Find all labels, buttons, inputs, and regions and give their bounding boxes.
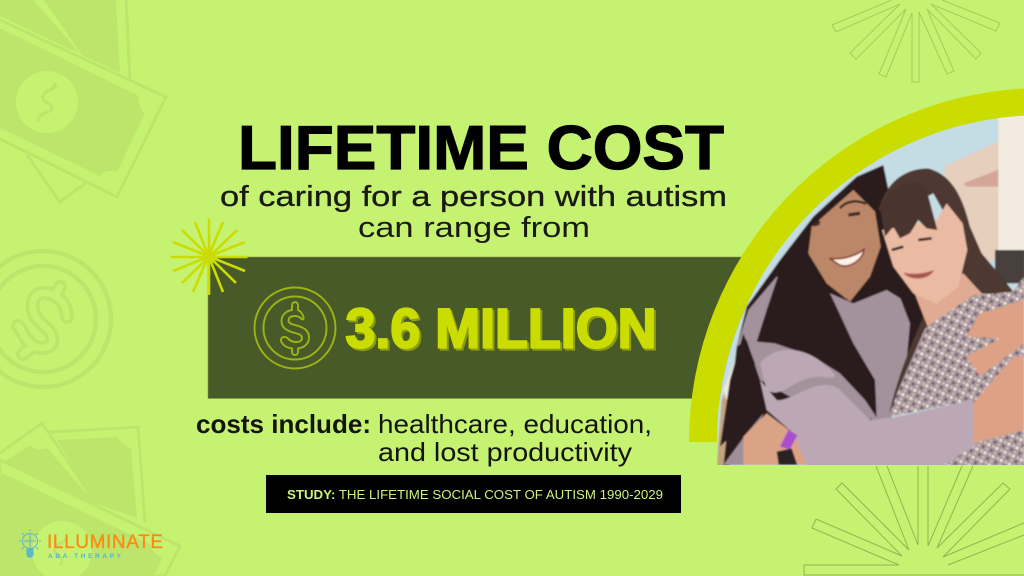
watch: [780, 430, 797, 449]
icon: coin left: [0, 251, 111, 387]
logo wordmark: ILLUMINATE: [47, 532, 163, 553]
big number: 3.6 MILLION: [348, 298, 658, 362]
icon: money bills top left: [0, 0, 166, 202]
icon: lime starburst: [170, 218, 248, 295]
girl face: [882, 203, 967, 304]
girl neck: [913, 273, 982, 328]
lime arc: [689, 88, 1024, 442]
costs line 2: and lost productivity: [378, 437, 632, 467]
icon: money bills bottom left: [0, 423, 180, 576]
hands: [967, 300, 1024, 443]
icon: dollar coin: [254, 288, 336, 368]
subtitle line 2: can range from: [358, 212, 590, 244]
study source box: [266, 475, 681, 513]
costs line 1: healthcare, education,: [378, 409, 652, 439]
woman and girl hair backing: [723, 165, 933, 467]
big number: 3.6 MILLION: [346, 296, 656, 360]
subtitle line 1: of caring for a person with autism: [220, 181, 727, 213]
woman face: [808, 190, 881, 302]
girl bangs: [880, 194, 938, 239]
logo: [19, 529, 163, 560]
woman long hair: [719, 276, 924, 447]
photo: mother and daughter hugging: [713, 110, 1024, 470]
icon: lightbulb: [19, 529, 41, 557]
costs line 1: [196, 409, 652, 439]
dark highlight band: [208, 257, 748, 398]
icon: outlined sunburst bottom right: [804, 466, 1024, 575]
logo tagline: ABA THERAPY: [48, 553, 122, 560]
icon: outlined sunburst top right: [832, 0, 1000, 82]
woman sweater torso: [737, 277, 925, 420]
photo background: [713, 110, 1024, 470]
title: LIFETIME COST: [238, 114, 724, 183]
girl long hair: [879, 168, 1017, 413]
costs line 1: costs include:: [196, 409, 371, 439]
woman arm across: [760, 350, 977, 467]
study source box: STUDY: THE LIFETIME SOCIAL COST OF AUTISM 1990-2029: [287, 487, 663, 502]
girl dress: [890, 277, 1024, 467]
